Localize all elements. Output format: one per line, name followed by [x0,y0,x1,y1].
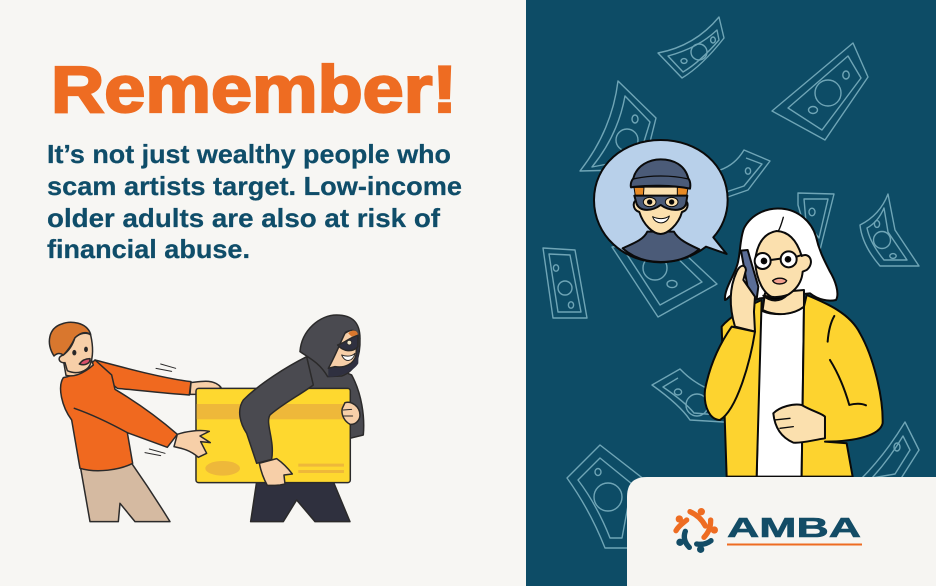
credit card [196,388,350,483]
man's neck [63,347,93,376]
glasses [755,251,802,269]
speech bubble with scammer [594,140,728,262]
thief's hair [348,330,358,337]
motion lines [145,364,176,456]
illustration: grandmother on phone [594,140,883,477]
scammer's mask [634,196,687,210]
man's hair [49,322,91,356]
bill 4 [720,150,770,199]
panel: left background [0,0,526,586]
panel: right background [526,0,936,586]
scammer's head [634,187,688,234]
bubble shape [594,140,728,262]
orange heads [676,508,718,534]
thief's hood opening [328,330,359,377]
thief's hood [300,315,360,377]
AMBA logo [676,508,862,553]
logo wordmark: AMBA [727,512,861,543]
body text: older adults are also at risk of [47,203,440,233]
thief's lower hand [259,459,292,485]
scammer's beanie [631,159,690,189]
man's trousers [81,463,170,522]
navy heads [676,539,704,553]
bill 8 [612,240,717,317]
bill 3 [580,81,656,171]
thief's face [328,330,357,368]
bill 2 [772,43,868,140]
hair part [778,217,783,231]
bill 7 [543,248,587,318]
man's torso and lower arm [61,360,177,471]
navy figures [684,531,711,547]
thief's body [283,357,364,438]
man's sweater crease [74,408,127,433]
logo icon: circle of people [676,508,718,553]
body text: It’s not just wealthy people who [47,139,451,169]
man's upper arm [95,360,191,395]
thief's eye [347,340,352,345]
man's lower hand [174,431,210,457]
thief's mask [338,335,358,351]
bill 11 [860,422,919,480]
cardigan right panel [802,295,883,477]
fist fingers [775,418,793,428]
thief's fingers [343,409,353,416]
face [755,231,811,298]
logo underline [727,544,862,546]
body text [47,139,462,264]
panel: logo card [627,477,936,586]
man's upper hand [190,381,221,394]
thief's smile [342,353,355,360]
cardigan left panel [722,300,762,477]
body text: financial abuse. [47,234,250,264]
man's face [73,347,90,365]
phone [741,250,758,300]
title: Remember! [51,52,457,126]
bill 10 [567,445,645,548]
neck [763,290,804,314]
scammer's hair [634,187,688,197]
grandmother's hair [725,208,837,301]
bill 9 [652,369,740,423]
bill 5 [798,193,834,250]
white shirt [757,307,804,477]
beanie fold [633,176,688,179]
scammer's smile [653,216,669,223]
orange figures [676,512,711,537]
scammer's eyes [643,197,678,207]
fist [773,405,825,443]
cardigan left sleeve [705,327,755,420]
mouth [773,278,787,284]
bill 6 [860,194,919,266]
chin shadow [763,295,787,300]
man's head [59,333,93,373]
cardigan creases [828,316,866,405]
thief's upper hand [342,402,360,424]
thief's arm [240,357,313,463]
hand holding phone [731,266,755,332]
body text: scam artists target. Low-income [47,171,462,201]
bill 1 [658,17,724,78]
money bills background [543,17,919,548]
thief's trousers [251,482,350,522]
scammer's shoulders [623,232,699,262]
illustration: man and thief pulling a credit card [49,315,364,522]
